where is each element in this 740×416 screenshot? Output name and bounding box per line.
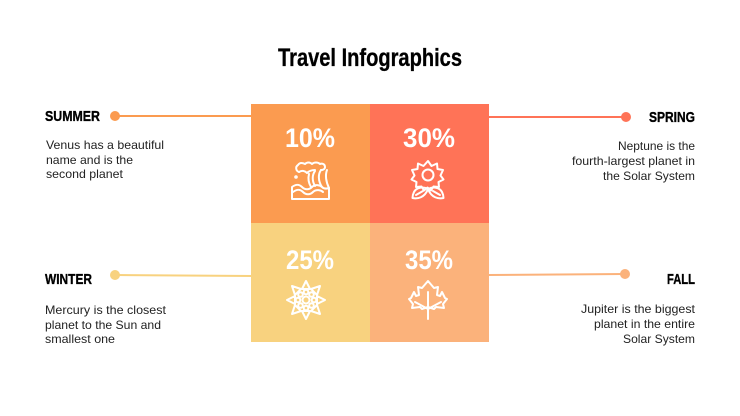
fall percentage: 35% bbox=[405, 245, 453, 275]
winter heading: WINTER bbox=[45, 271, 92, 288]
fall tile bbox=[370, 223, 489, 342]
spring connector bbox=[488, 112, 631, 122]
summer text: Venus has a beautiful bbox=[46, 138, 164, 152]
summer text bbox=[46, 138, 164, 181]
fall heading: FALL bbox=[667, 271, 695, 288]
icon: maple leaf bbox=[409, 281, 447, 319]
icon: snowflake bbox=[287, 281, 325, 319]
panel: winter bbox=[45, 270, 252, 346]
spring text: the Solar System bbox=[603, 169, 695, 183]
icon: wave bbox=[292, 162, 329, 199]
panel: fall bbox=[488, 269, 696, 346]
winter text: Mercury is the closest bbox=[45, 303, 167, 317]
spring text: fourth-largest planet in bbox=[572, 154, 695, 168]
spring heading: SPRING bbox=[649, 109, 695, 126]
panel: summer bbox=[45, 108, 252, 181]
fall connector bbox=[488, 269, 630, 279]
fall text bbox=[581, 302, 696, 346]
panel: central grid bbox=[251, 104, 489, 342]
winter text: planet to the Sun and bbox=[45, 318, 161, 332]
summer text: second planet bbox=[46, 167, 124, 181]
winter connector bbox=[110, 270, 252, 280]
winter text bbox=[45, 303, 167, 346]
title: Travel Infographics bbox=[278, 44, 462, 72]
spring percentage: 30% bbox=[403, 123, 455, 153]
panel: spring bbox=[488, 109, 695, 183]
summer connector bbox=[110, 111, 252, 121]
spring text: Neptune is the bbox=[618, 139, 695, 153]
summer percentage: 10% bbox=[285, 123, 335, 153]
winter percentage: 25% bbox=[286, 245, 334, 275]
summer text: name and is the bbox=[46, 153, 133, 167]
fall text: planet in the entire bbox=[594, 317, 695, 331]
fall text: Jupiter is the biggest bbox=[581, 302, 696, 316]
spring text bbox=[572, 139, 695, 183]
summer heading: SUMMER bbox=[45, 108, 100, 125]
winter text: smallest one bbox=[45, 332, 115, 346]
icon: sunflower bbox=[412, 161, 444, 198]
summer tile bbox=[251, 104, 370, 223]
fall text: Solar System bbox=[623, 332, 695, 346]
winter tile bbox=[251, 223, 370, 342]
spring tile bbox=[370, 104, 489, 223]
